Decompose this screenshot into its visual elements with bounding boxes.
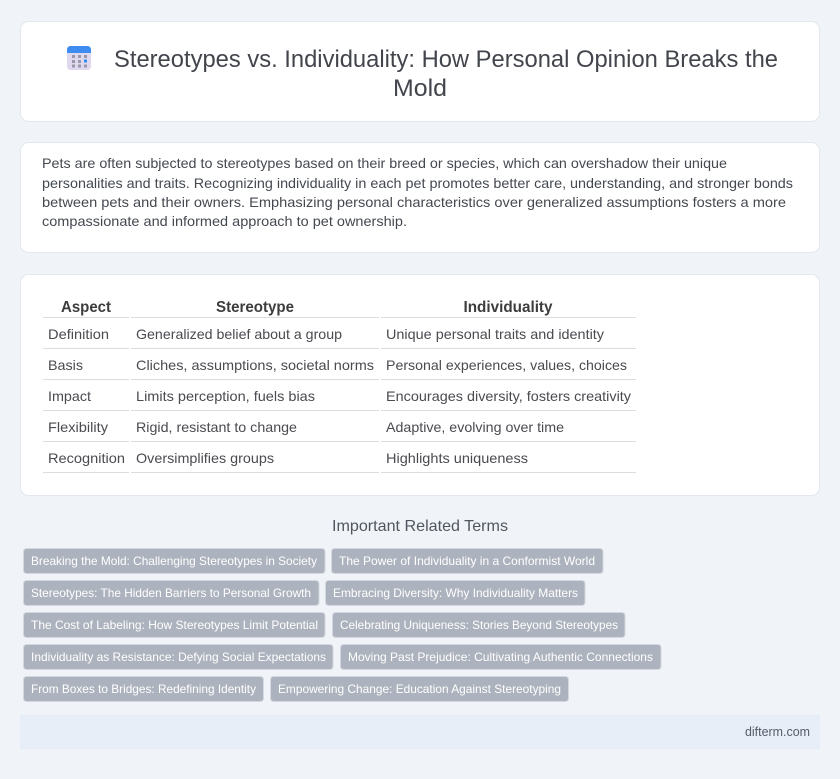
tag xyxy=(24,676,264,702)
row: Basis: Basis xyxy=(48,357,83,373)
title xyxy=(114,46,778,102)
intro text: Pets are often subjected to stereotypes based on their breed or species, which can overshadow their unique xyxy=(42,155,727,171)
intro text xyxy=(42,155,793,229)
tag: Embracing Diversity: Why Individuality Matters xyxy=(333,586,578,600)
tag xyxy=(24,644,333,670)
tag: Individuality as Resistance: Defying Social Expectations xyxy=(31,650,326,664)
row: Flexibility: Rigid, resistant to change xyxy=(136,419,297,435)
table header xyxy=(61,299,553,316)
title: Stereotypes vs. Individuality: How Personal Opinion Breaks the xyxy=(114,46,778,73)
tag xyxy=(326,580,585,606)
tag: The Cost of Labeling: How Stereotypes Limit Potential xyxy=(31,618,318,632)
row: Impact: Encourages diversity, fosters creativity xyxy=(386,388,631,404)
footer bar xyxy=(20,715,820,749)
row: Flexibility: Adaptive, evolving over time xyxy=(386,419,564,435)
intro text: compassionate and informed approach to pet ownership. xyxy=(42,213,407,229)
intro text: personalities and traits. Recognizing individuality in each pet promotes better care, understanding, and stronger bonds xyxy=(42,175,793,191)
tag xyxy=(332,612,625,638)
tag: Breaking the Mold: Challenging Stereotypes in Society xyxy=(31,554,317,568)
title: Mold xyxy=(393,75,447,102)
tag xyxy=(24,580,319,606)
panel: comparison table xyxy=(20,274,820,496)
row: Impact: Impact xyxy=(48,388,91,404)
row: Definition xyxy=(48,326,604,342)
row: Flexibility: Flexibility xyxy=(48,419,108,435)
tag: The Power of Individuality in a Conformist World xyxy=(339,554,595,568)
tag: Empowering Change: Education Against Stereotyping xyxy=(278,682,561,696)
tag: Moving Past Prejudice: Cultivating Authentic Connections xyxy=(348,650,653,664)
tag xyxy=(24,612,325,638)
row: Recognition: Highlights uniqueness xyxy=(386,450,528,466)
footer credit: difterm.com xyxy=(745,725,810,739)
tag xyxy=(24,548,325,574)
tag xyxy=(332,548,603,574)
row: Impact xyxy=(48,388,631,404)
table header: Aspect xyxy=(61,299,111,316)
row: Recognition xyxy=(48,450,528,466)
row: Basis xyxy=(48,357,627,373)
intro text: between pets and their owners. Emphasizing personal characteristics over generalized assumptions fosters a more xyxy=(42,194,786,210)
tag: Celebrating Uniqueness: Stories Beyond Stereotypes xyxy=(340,618,618,632)
table header: Individuality xyxy=(464,299,553,316)
row: Recognition: Recognition xyxy=(48,450,125,466)
tag: Stereotypes: The Hidden Barriers to Personal Growth xyxy=(31,586,311,600)
row: Definition: Unique personal traits and identity xyxy=(386,326,604,342)
row: Definition: Generalized belief about a group xyxy=(136,326,342,342)
table header: Stereotype xyxy=(216,299,294,316)
icon: calendar grid xyxy=(67,46,91,70)
tag xyxy=(270,676,568,702)
row: Flexibility xyxy=(48,419,564,435)
row: Basis: Cliches, assumptions, societal norms xyxy=(136,357,374,373)
row: Basis: Personal experiences, values, choices xyxy=(386,357,627,373)
row: Impact: Limits perception, fuels bias xyxy=(136,388,315,404)
panel: intro paragraph xyxy=(20,142,820,252)
row: Recognition: Oversimplifies groups xyxy=(136,450,274,466)
row: Definition: Definition xyxy=(48,326,109,342)
tag xyxy=(340,644,661,670)
tags: related terms xyxy=(24,548,661,702)
header panel xyxy=(20,22,820,122)
heading: related terms: Important Related Terms xyxy=(332,518,508,535)
tag: From Boxes to Bridges: Redefining Identity xyxy=(31,682,256,696)
